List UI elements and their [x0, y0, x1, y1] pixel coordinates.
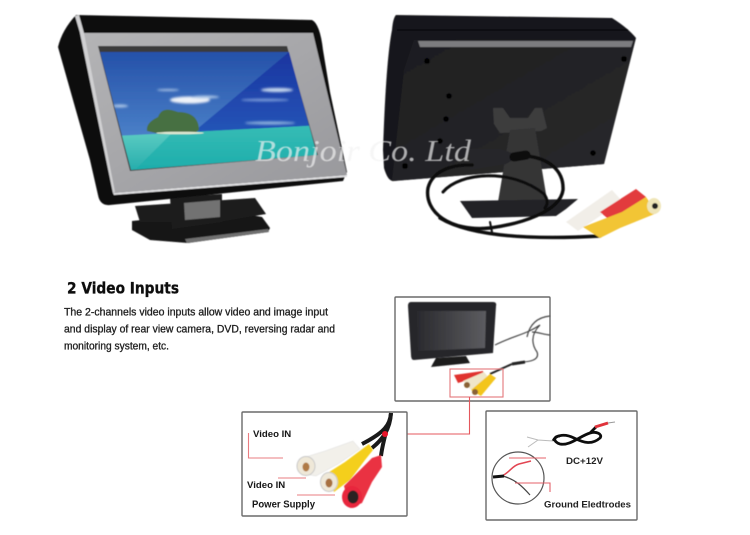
red highlight box: [450, 369, 503, 397]
small cables: [490, 316, 550, 374]
split wires: [493, 458, 550, 495]
silver bezel: [80, 33, 347, 193]
screen: [98, 46, 318, 171]
label: video in 2: Video IN: [247, 480, 285, 491]
white rca plug: [297, 441, 360, 476]
monitor stand: [132, 194, 270, 243]
red power plug: [342, 455, 382, 508]
rca connectors: [566, 189, 661, 238]
rear stand: [460, 108, 578, 218]
label: video in 1: Video IN: [253, 429, 291, 440]
panel: connector closeup: [242, 412, 407, 516]
usb plug and cable: [428, 149, 600, 237]
label: ground electrodes: Ground Eledtrodes: [544, 500, 631, 510]
screen sky: [100, 51, 289, 136]
panel: power wires: [486, 411, 637, 520]
small monitor: [408, 302, 496, 367]
panel: monitor with cables: [395, 297, 550, 401]
clouds: [112, 88, 295, 124]
yellow rca plug: [320, 444, 373, 492]
description text: and display of rear view camera, DVD, reversing radar and: [64, 324, 335, 336]
connector cables: [362, 413, 391, 456]
infographic canvas: [57, 14, 662, 521]
label leader lines: [248, 433, 335, 495]
rear view monitor: [383, 15, 661, 238]
island: [147, 110, 199, 134]
description text: The 2-channels video inputs allow video and image input: [64, 306, 328, 318]
red connector line: [385, 397, 470, 434]
screw holes: [402, 56, 627, 169]
sun hood: [58, 15, 347, 205]
rear housing: [383, 15, 636, 181]
heading: 2 Video Inputs: [67, 278, 179, 298]
connector pointer dot: [382, 431, 388, 437]
watermark: Bonjoir Co. Ltd: [255, 133, 472, 168]
screen sea: [122, 125, 318, 170]
label: dc 12v: DC+12V: [566, 455, 604, 466]
zoom circle: [492, 452, 544, 504]
description text: [64, 306, 335, 352]
power cable: [527, 422, 615, 447]
rear top highlight strip: [418, 41, 633, 47]
front view monitor: [58, 15, 347, 243]
label: power supply: Power Supply: [252, 500, 315, 510]
small rca connectors: [454, 371, 496, 396]
description text: monitoring system, etc.: [64, 340, 169, 352]
